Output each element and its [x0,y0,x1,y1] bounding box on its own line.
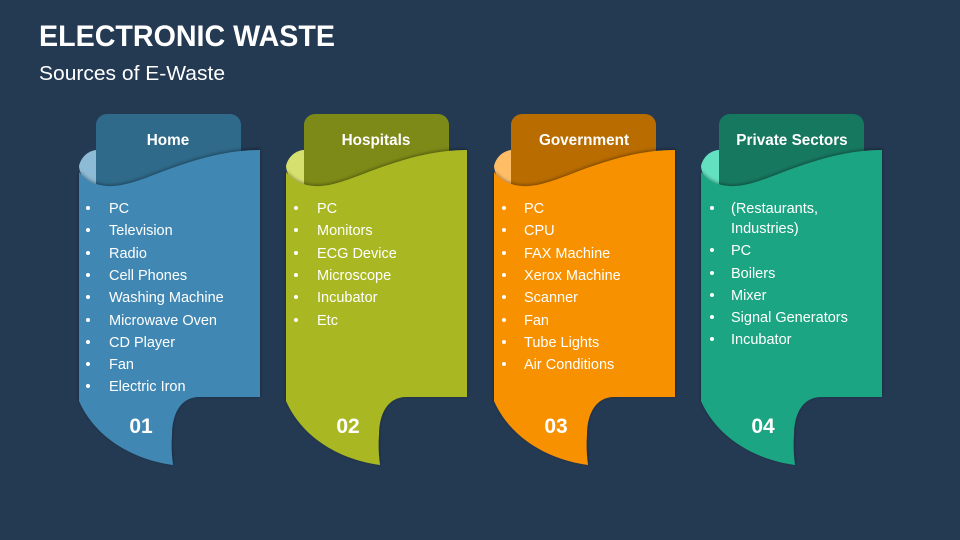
list: government: CPU [524,223,555,239]
list: government: PC [524,201,544,217]
fold highlight: home [79,150,119,190]
list: home: CD Player [109,335,175,351]
list: private sectors: PC [731,243,751,259]
list: hospitals: ECG Device [317,246,397,262]
number: 04: 04 [751,415,775,438]
card body: private sectors [701,150,882,465]
list: private sectors: Incubator [731,332,792,348]
card body: government [494,150,675,465]
fold highlight: hospitals [286,150,326,190]
list: government: Fan [524,313,549,329]
list: private sectors: Mixer [731,288,767,304]
list: home: Fan [109,357,134,373]
panel: home [79,114,260,465]
tab: hospitals [304,114,449,194]
list: hospitals: Etc [317,313,338,329]
list: hospitals [294,201,397,329]
subtitle: Sources of E-Waste [39,62,225,85]
tab: private sectors [719,114,864,194]
card body: home [79,150,260,465]
list: private sectors: (Restaurants, [731,201,818,217]
list: private sectors [710,201,848,348]
list: private sectors: Signal Generators [731,310,848,326]
list: home: Cell Phones [109,268,187,284]
number: 03: 03 [544,415,568,438]
number: 01: 01 [129,415,153,438]
list: home: Radio [109,246,147,262]
list: government: FAX Machine [524,246,610,262]
list: home: Television [109,223,173,239]
panel: hospitals [286,114,467,465]
list: government: Air Conditions [524,357,614,373]
list: government: Xerox Machine [524,268,621,284]
list: home: Washing Machine [109,290,224,306]
tab: home [96,114,241,194]
list: hospitals: Monitors [317,223,373,239]
number: 02: 02 [336,415,360,438]
list: government: Tube Lights [524,335,599,351]
heading: private sectors: Private Sectors [736,132,848,149]
list: home [86,201,224,395]
list: home: PC [109,201,129,217]
list: hospitals: Incubator [317,290,378,306]
list: hospitals: PC [317,201,337,217]
list: home: Electric Iron [109,379,186,395]
heading: hospitals: Hospitals [342,132,410,149]
list: home: Microwave Oven [109,313,217,329]
panel: government [494,114,675,465]
list: government [502,201,621,373]
list: hospitals: Microscope [317,268,391,284]
list: private sectors: Boilers [731,266,775,282]
panel: private sectors [701,114,882,465]
list: private sectors: Industries) [731,221,799,237]
fold highlight: government [494,150,534,190]
list: government: Scanner [524,290,578,306]
heading: government: Government [539,132,629,149]
card body: hospitals [286,150,467,465]
title: ELECTRONIC WASTE [39,20,335,53]
fold highlight: private sectors [701,150,741,190]
tab: government [511,114,656,194]
heading: home: Home [147,132,189,149]
